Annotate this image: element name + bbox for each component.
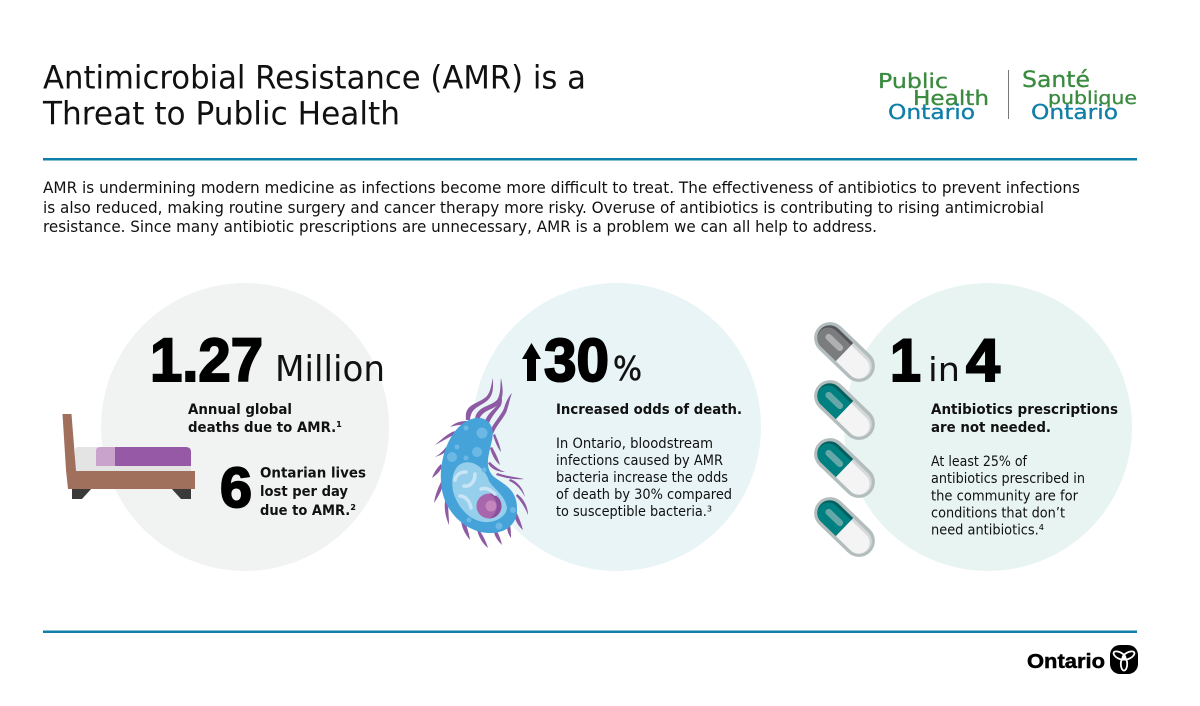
text: prescriptions detail [931,454,1085,538]
text: Ontarian lives lost: lost per day [260,484,348,500]
intro paragraph: resistance. Since many antibiotic prescriptions are unnecessary, AMR is a problem we can all help to address. [43,217,877,236]
panel background circle [473,283,761,571]
text: Ontarian lives lost: due to AMR.² [260,503,356,519]
text: prescriptions detail: need antibiotics.⁴ [931,522,1044,538]
stat: 1.27 Million: 1.27 [150,326,263,394]
panel: unnecessary prescriptions [807,283,1132,571]
logo: Ontario [1027,645,1138,674]
logo: Public Health Ontario: Ontario [888,100,975,124]
stat: 1.27 Million: Million [275,349,385,390]
text: prescriptions detail: conditions that don’t [931,506,1065,522]
stat: 1 in 4: in [928,350,960,389]
icon: teal capsule 3 [807,490,882,564]
panel background circle [844,283,1132,571]
text: annual global deaths [188,402,342,436]
text: prescriptions heading: Antibiotics prescriptions [931,402,1118,418]
text: prescriptions detail: At least 25% of [931,454,1028,470]
logo: Public Health Ontario: Health [913,86,989,110]
intro paragraph: AMR is undermining modern medicine as infections become more difficult to treat. The effectiveness of antibiotics to prevent infections [43,178,1080,197]
stat: up arrow 30%: 30 [544,327,609,394]
text: annual global deaths: Annual global [188,402,292,418]
stat: 1 in 4: 1 [890,327,921,394]
panel background circle [101,283,389,571]
title [42,58,586,132]
text: increased odds detail: infections caused by AMR [556,453,723,469]
text: Ontarian lives lost [260,466,366,519]
text: increased odds detail: bacteria increase the odds [556,470,728,486]
text: prescriptions heading [931,402,1118,436]
icon: capsules [807,315,882,564]
text: prescriptions heading: are not needed. [931,420,1051,436]
panel: increased odds of death [432,283,761,571]
icon: teal capsule 1 [807,373,882,447]
stat: 1 in 4: 4 [966,327,1001,394]
icon: bacterium [432,378,528,548]
text: increased odds detail: In Ontario, bloodstream [556,436,713,452]
stat: up arrow 30%: % [613,349,642,388]
text: prescriptions detail: the community are for [931,488,1078,504]
stat: up arrow 30% [522,327,642,394]
text: increased odds detail [556,436,732,520]
icon: grey capsule [807,315,882,389]
title: Threat to Public Health [42,94,400,132]
text: Ontarian lives lost: Ontarian lives [260,466,366,482]
icon: trillium [1110,645,1138,674]
logo: Ontario: Ontario [1027,650,1105,673]
intro paragraph: is also reduced, making routine surgery and cancer therapy more risky. Overuse of antibiotics is contributing to rising antimicrobial [43,198,1044,217]
text: annual global deaths: deaths due to AMR.¹ [188,420,342,436]
logo: Public Health Ontario [878,68,1137,124]
logo: Public Health Ontario: publique [1048,88,1137,109]
text: prescriptions detail: antibiotics prescribed in [931,471,1085,487]
title: Antimicrobial Resistance (AMR) is a [43,58,586,96]
logo: Public Health Ontario: Santé [1022,68,1090,93]
intro paragraph [43,178,1080,236]
text: increased odds detail: to susceptible bacteria.³ [556,504,712,520]
logo: Public Health Ontario: Ontario [1031,100,1118,124]
stat: 1 in 4 [890,327,1001,394]
stat: 6: 6 [220,456,252,520]
stat: 1.27 Million [150,326,385,394]
icon: teal capsule 2 [807,431,882,505]
icon: bed [62,414,195,499]
text: increased odds heading: Increased odds of death. [556,402,742,418]
panel: global deaths [62,283,389,571]
logo: Public Health Ontario: Public [878,69,948,93]
text: increased odds detail: of death by 30% compared [556,487,732,503]
